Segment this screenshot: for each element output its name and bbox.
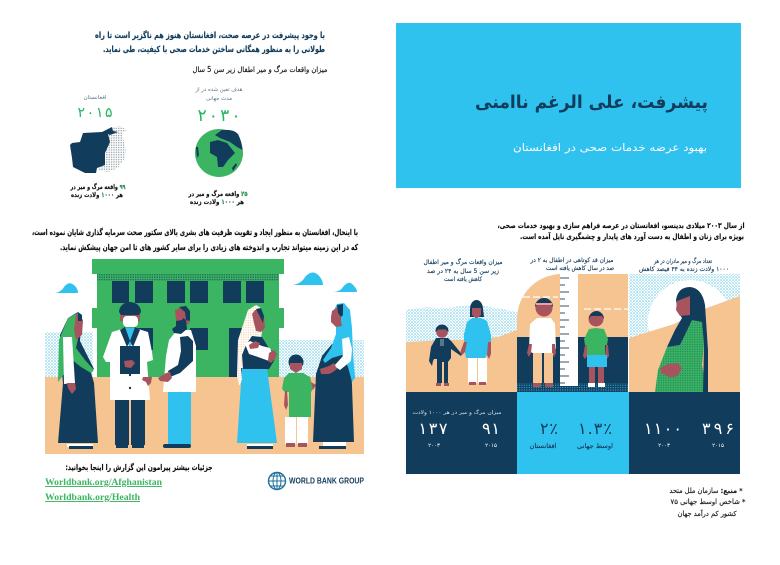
panel: title banner <box>396 23 741 188</box>
label: Afghanistan: افغانستان <box>84 95 107 101</box>
paragraph: investing in human capacity: که در این زمینه میتواند تجارب و اندوخته های زیادی را برای سایر کشور های تا امن جهان پیشکش نماید. <box>60 242 358 253</box>
panel: maternal mortality scene <box>629 274 740 392</box>
stat: global target 2030: مدت جهانی <box>206 96 232 102</box>
illustration: clinic with health workers and families <box>45 259 364 454</box>
footnotes: * شاخص اوسط جهانی ۷۵ <box>670 498 746 506</box>
figure: child in green shirt <box>282 354 316 447</box>
footer: read more: جزئیات بیشتر پیرامون این گزارش را اینجا بخوانید: <box>66 462 213 473</box>
figure: doctor with mask and clipboard <box>103 302 153 448</box>
column caption: under-5 mortality: میزان واقعات مرگ و میر اطفال <box>424 257 502 266</box>
value: 2 percent: ۲٪ <box>540 419 558 438</box>
figure: child in green shirt <box>583 311 609 387</box>
footnotes: کشور کم درآمد جهان <box>678 509 737 518</box>
clouds <box>56 272 357 293</box>
link: Worldbank.org/Afghanistan: Worldbank.org/Afghanistan <box>45 478 163 488</box>
column caption: stunting: میزان قد کوتاهی در اطفال به ۲ در <box>530 257 614 264</box>
stat panel: child mortality per 1000: ۲۰۰۳ <box>428 443 440 449</box>
intro heading: left page: با وجود پیشرفت در عرصه صحت، افغانستان هنوز هم ناگزیر است تا راه <box>95 30 325 41</box>
intro heading: left page <box>95 30 325 55</box>
stat: Afghanistan 2015: هر ۱۰۰۰ ولادت زنده <box>71 191 123 199</box>
height ruler <box>560 274 578 386</box>
caption: 99 deaths per 1000: ۹۹ واقعه مرگ و میر در <box>70 182 126 191</box>
stat: global target 2030 <box>188 87 248 206</box>
figure: stunted child <box>527 298 556 387</box>
building <box>92 259 284 377</box>
stat: global target 2030: هر ۱۰۰۰ ولادت زنده <box>190 198 244 206</box>
title: پیشرفت، علی الرغم ناامنی <box>475 92 708 113</box>
wordmark: WORLD BANK GROUP <box>289 476 364 486</box>
label: میزان مرگ و میر در هر ۱۰۰۰ ولادت <box>413 409 502 416</box>
stat panel: stunting rates <box>517 392 629 474</box>
link: Worldbank.org/Health: Worldbank.org/Health <box>45 493 141 503</box>
value: 396 in 2015: ۳۹۶ <box>702 419 734 438</box>
paragraph: investing in human capacity: با اینحال، افغانستان به منظور ایجاد و تقویت ظرفیت های بشری بالای سکتور صحت سرمایه گذاری شایان نموده است، <box>32 227 358 238</box>
icon: globe logo <box>268 472 286 490</box>
stat panel: maternal mortality: ۲۰۰۳ <box>658 443 670 449</box>
value: 91 in 2015: ۹۱ <box>482 419 500 438</box>
year labels: ۲۰۱۵ <box>712 443 724 449</box>
ground and dotted background <box>45 332 93 378</box>
column caption: under-5 mortality: زیر سن 5 سال به ۲۴ در صد <box>427 268 499 275</box>
caption: 25 deaths per 1000: ۲۵ واقعه مرگ و میر در <box>188 189 248 198</box>
stat panel: child mortality per 1000 <box>406 392 517 474</box>
footnotes <box>670 487 746 518</box>
subtitle: بهبود عرضه خدمات صحی در افغانستان <box>513 142 707 154</box>
paragraph: investing in human capacity <box>32 227 358 253</box>
paragraph: progress since 2003 <box>498 221 744 241</box>
stat: Afghanistan 2015 <box>70 95 127 199</box>
value: 137 in 2003: ۱۳۷ <box>418 419 448 438</box>
paragraph: progress since 2003: از سال ۲۰۰۳ میلادی بدینسو، افغانستان در عرصه فراهم سازی و بهبود خدمات صحی، <box>498 221 744 230</box>
figure: pregnant woman in blue scarf <box>313 303 355 449</box>
figure: pregnant mother <box>655 287 708 392</box>
figure: woman holding baby <box>237 305 277 449</box>
column caption: stunting: صد در سال کاهش یافته است <box>546 265 614 272</box>
panel: stunting scene with height ruler <box>517 274 628 392</box>
figure: taller girl <box>460 300 491 385</box>
panel: child mortality scene <box>406 300 517 392</box>
year 2015: ۲۰۱۵ <box>78 105 112 121</box>
column caption: maternal mortality <box>639 256 729 281</box>
icon: globe <box>195 129 243 177</box>
value: 1.3 percent: ۱.۳٪ <box>578 419 612 438</box>
value: 1100 in 2003: ۱۱۰۰ <box>644 419 682 438</box>
figure: small boy <box>429 325 462 386</box>
intro heading: left page: طولانی را به منظور همگانی ساختن خدمات صحی با کیفیت، طی نماید. <box>103 44 325 55</box>
logo: World Bank Group <box>268 472 364 490</box>
figure: woman in green scarf <box>58 312 98 449</box>
year 2030: ۲۰۳۰ <box>198 106 240 126</box>
column caption: maternal mortality: ۱۰۰۰ ولادت زنده به ۴۴ فیصد کاهش <box>639 266 729 273</box>
column caption: maternal mortality: تعداد مرگ و میر مادران در هر <box>653 256 712 265</box>
year labels: ۲۰۱۵ <box>485 443 497 449</box>
figure: bearded man <box>158 306 196 448</box>
label: Afghanistan: افغانستان <box>530 442 557 450</box>
chart subtitle: under-5 mortality: میزان واقعات مرگ و میر اطفال زیر سن 5 سال <box>192 64 328 74</box>
icon: Afghanistan map <box>70 126 127 173</box>
column caption: under-5 mortality: کاهش یافته است <box>444 276 482 283</box>
column caption: under-5 mortality <box>424 257 502 283</box>
footnotes: * منبع: سازمان ملل متحد <box>670 487 743 495</box>
label: global average: اوسط جهانی <box>577 442 613 450</box>
column caption: stunting <box>530 257 614 272</box>
label: global target: هدف تعین شده در از <box>195 87 243 93</box>
stat panel: maternal mortality <box>629 392 740 474</box>
column caption: maternal mortality: یافته است <box>670 274 694 281</box>
